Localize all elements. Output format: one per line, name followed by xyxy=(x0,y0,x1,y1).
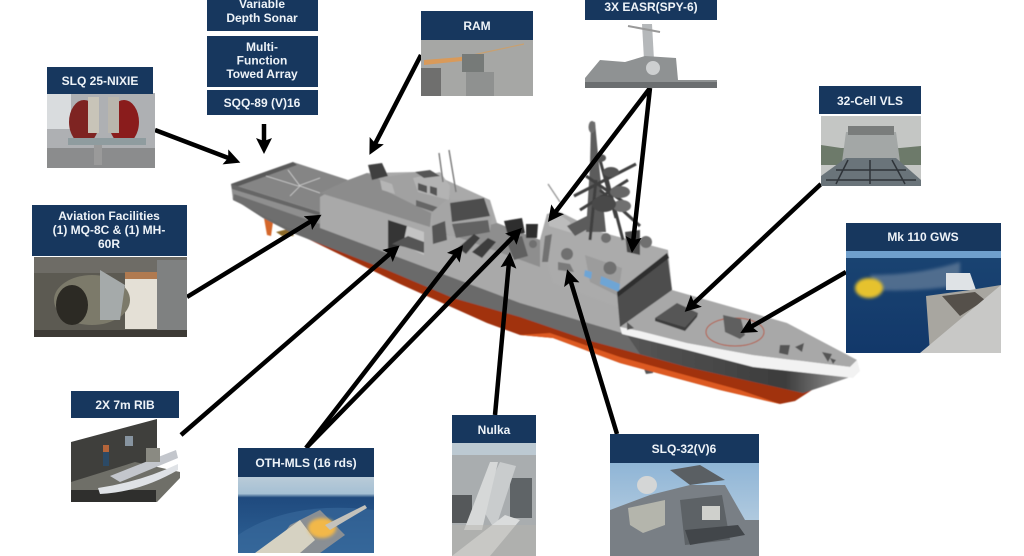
photo: helicopter in hangar xyxy=(34,257,187,337)
panel: OTH-MLS xyxy=(238,448,374,553)
RAM launcher on hangar xyxy=(368,163,388,180)
header: Aviation Facilities: 60R xyxy=(98,237,120,251)
Mk 110 gun xyxy=(723,315,745,339)
amidships deck xyxy=(430,223,540,267)
header: SLQ-32(V)6 xyxy=(610,434,759,463)
blue windows xyxy=(584,270,620,292)
arrow: SLQ-32 to array xyxy=(570,279,617,434)
panel: SQQ-89 (V)16: SQQ-89 (V)16 xyxy=(224,96,301,110)
panel: 2X 7m RIB xyxy=(71,391,180,502)
gun training circle xyxy=(706,318,764,346)
panel: Variable Depth Sonar: Depth Sonar xyxy=(226,11,298,25)
arrow: EASR to forward array xyxy=(633,88,650,243)
mid superstructure xyxy=(432,200,492,236)
panel: 3X EASR xyxy=(585,0,717,88)
arrow: RAM to launcher xyxy=(374,55,421,146)
propeller xyxy=(276,229,294,236)
arrow: RIB to boat bay xyxy=(181,252,392,435)
foredeck xyxy=(620,290,857,367)
dark grey hull band xyxy=(232,198,855,393)
rudder xyxy=(264,218,273,236)
pilot house tower xyxy=(413,172,450,200)
hangar roof xyxy=(320,173,432,227)
forward superstructure xyxy=(540,212,672,308)
photo: Nulka launcher xyxy=(452,443,536,556)
panel: Multi-Function Towed Array: Function xyxy=(237,54,287,68)
masts aft xyxy=(439,150,456,192)
panel: RAM xyxy=(421,11,533,96)
arrow: SLQ 25-NIXIE to stern xyxy=(155,130,231,159)
VLS hatch xyxy=(655,303,698,327)
flight deck xyxy=(231,162,348,212)
panel: Multi-Function Towed Array: Towed Array xyxy=(226,67,298,81)
photo: NIXIE winch xyxy=(47,93,155,168)
superstructure base and main hull side xyxy=(320,172,672,333)
panel: Multi-Function Towed Array: Multi- xyxy=(246,40,278,54)
header: Aviation Facilities: (1) MQ-8C & (1) MH- xyxy=(53,223,165,237)
arrow: aviation to hangar xyxy=(187,220,313,297)
header: SLQ 25-NIXIE: SLQ 25-NIXIE xyxy=(62,74,138,88)
header: Aviation Facilities: Aviation Facilities xyxy=(58,209,160,223)
header: SLQ-32(V)6: SLQ-32(V)6 xyxy=(652,442,717,456)
header: 3X EASR(SPY-6): 3X EASR(SPY-6) xyxy=(604,0,698,14)
deckhouse equipment xyxy=(504,218,538,238)
header: 2X 7m RIB: 2X 7m RIB xyxy=(95,398,155,412)
header: RAM: RAM xyxy=(463,19,491,33)
red lower hull xyxy=(288,225,812,404)
header: Mk 110 GWS xyxy=(846,223,1001,251)
panel: 32-Cell VLS xyxy=(819,86,921,186)
panel: Nulka xyxy=(452,415,536,556)
header: 32-Cell VLS: 32-Cell VLS xyxy=(837,94,903,108)
photo: gun firing xyxy=(846,251,1001,353)
arrow: Mk 110 to gun xyxy=(749,272,846,328)
mast xyxy=(548,121,640,240)
OTH-MLS canisters xyxy=(458,234,496,258)
panel: Multi-Function Towed Array xyxy=(207,36,318,87)
arrow: SQQ-89 to stern xyxy=(262,124,266,144)
photo: VLS deck xyxy=(821,116,921,186)
panel: Mk 110 GWS xyxy=(846,223,1001,353)
photo: RAM launch xyxy=(421,40,533,96)
panel: SLQ-32(V)6 xyxy=(610,434,759,556)
hangar upper block xyxy=(380,172,450,215)
panel: SLQ 25-NIXIE xyxy=(47,67,155,168)
radar array housing xyxy=(625,230,640,255)
panel: Variable Depth Sonar xyxy=(207,0,318,31)
deck edge rim xyxy=(620,327,860,378)
panel: Aviation Facilities xyxy=(32,205,187,337)
header: Mk 110 GWS: Mk 110 GWS xyxy=(887,230,959,244)
arrow: Nulka to decoy launcher xyxy=(495,262,509,415)
photo: destroyer with SPY-6 xyxy=(585,24,717,88)
header: Nulka: Nulka xyxy=(478,423,511,437)
stern side xyxy=(231,184,320,228)
sonar dome xyxy=(643,366,654,374)
header: OTH-MLS (16 rds): OTH-MLS (16 rds) xyxy=(255,456,357,470)
bow fittings xyxy=(779,343,836,364)
header: Aviation Facilities xyxy=(32,205,187,256)
radome domes xyxy=(529,233,652,274)
photo: missile launch xyxy=(238,477,374,553)
forward dark bulwark xyxy=(617,253,672,327)
arrow: OTH-MLS to aft launchers xyxy=(306,253,457,448)
ship: frigate 3D model xyxy=(231,121,860,404)
panel: SQQ-89 (V)16 xyxy=(207,90,318,115)
hangar side opening with boat xyxy=(388,220,424,255)
arrow: EASR to port array xyxy=(554,88,650,214)
arrow: 32-Cell VLS to hatch xyxy=(692,184,821,305)
header: Nulka xyxy=(452,415,536,443)
arrow: OTH-MLS to forward launchers xyxy=(306,235,515,448)
photo: SLQ-32 on ship xyxy=(610,463,759,556)
photo: RIB bay render xyxy=(71,419,180,502)
